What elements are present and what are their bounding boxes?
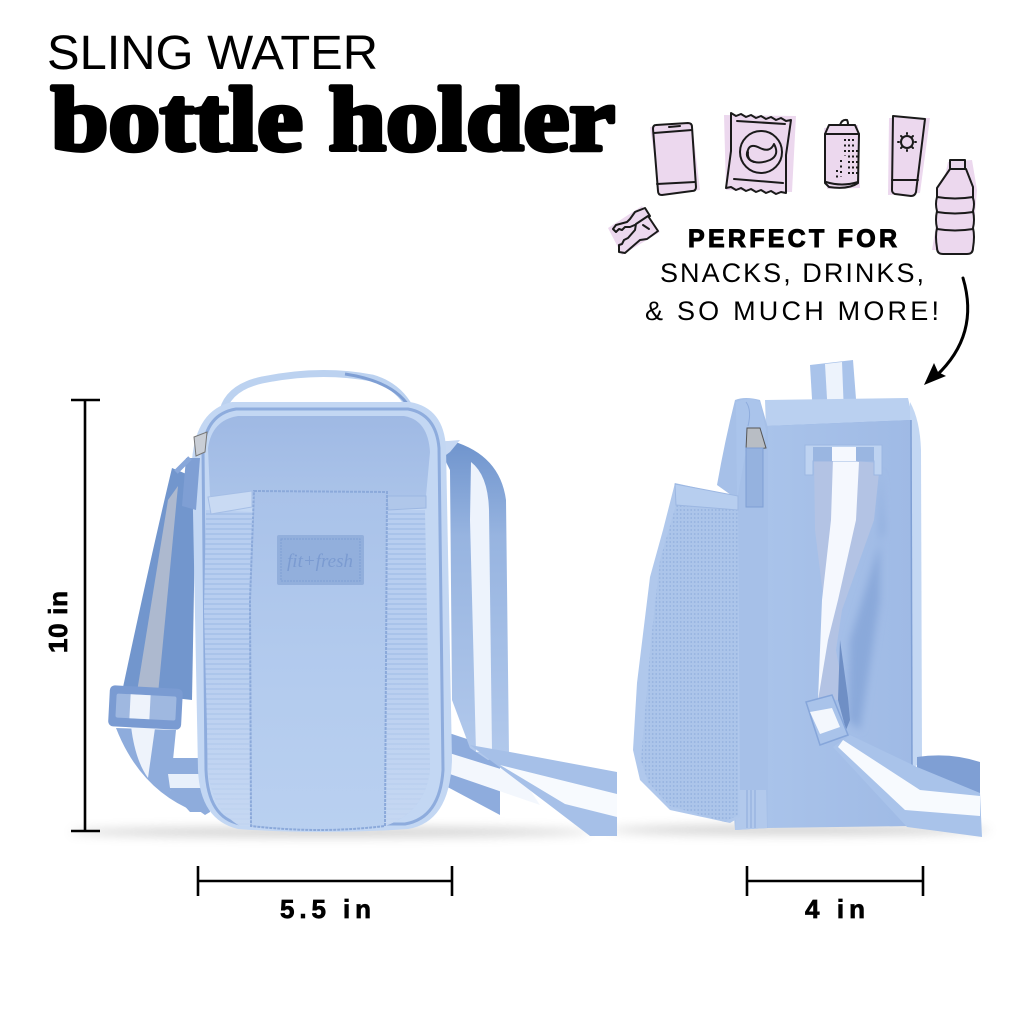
right shoulder strap [436, 440, 617, 836]
callout text: perfect for: PERFECT FOR [688, 225, 897, 253]
callout text: perfect for [645, 225, 939, 326]
ground shadows [70, 825, 990, 837]
callout line: so much more: & SO MUCH MORE! [645, 296, 939, 326]
side strap upper buckle [805, 445, 882, 475]
arrow: curved pointer to side bag [924, 278, 968, 385]
dimension: width 5.5 in [198, 866, 452, 924]
icon: sunscreen tube [888, 116, 930, 196]
elastic band left [208, 491, 252, 514]
icon: phone [650, 123, 700, 195]
icon: soda can [824, 120, 860, 189]
dimension: depth 4 in: 4 in [805, 894, 865, 924]
product: front view of bag [108, 373, 617, 836]
icon: snack bag [724, 113, 796, 194]
icon: water bottle [932, 160, 977, 254]
lower strap [917, 755, 980, 795]
dimension: height 10 in: 10 in [43, 591, 73, 653]
main side body [767, 420, 912, 828]
zipper pull [746, 428, 766, 507]
left mesh pocket [204, 510, 252, 826]
dimension: width 5.5 in: 5.5 in [280, 894, 371, 924]
side strap lower buckle [806, 695, 848, 745]
callout line: snacks, drinks: SNACKS, DRINKS, [660, 258, 924, 288]
bag body [192, 402, 452, 832]
side mesh pocket [633, 483, 740, 823]
title line: bottle holder: bottle holder [51, 69, 615, 170]
zipper column [717, 398, 768, 830]
center front panel [250, 491, 387, 830]
dimension: height 10 in [43, 400, 100, 831]
elastic band right [387, 496, 426, 510]
logo badge [277, 535, 364, 585]
zipper pull [176, 432, 207, 510]
top carry handle [222, 373, 412, 415]
top face [765, 398, 914, 428]
dimension: depth 4 in [747, 866, 923, 924]
logo badge: fit+fresh [287, 551, 353, 572]
left shoulder strap [108, 468, 210, 815]
top lid panel [208, 416, 430, 496]
icon group: pink item doodles [608, 113, 977, 255]
lower right strap [440, 733, 540, 815]
side strap [805, 445, 982, 837]
title line: sling water: SLING WATER [47, 27, 378, 80]
product: side view of bag [633, 360, 982, 837]
light right edge [910, 402, 922, 770]
title [47, 27, 615, 170]
icon: keys [608, 206, 660, 255]
top handle strap [810, 360, 857, 416]
right mesh pocket [385, 510, 430, 826]
